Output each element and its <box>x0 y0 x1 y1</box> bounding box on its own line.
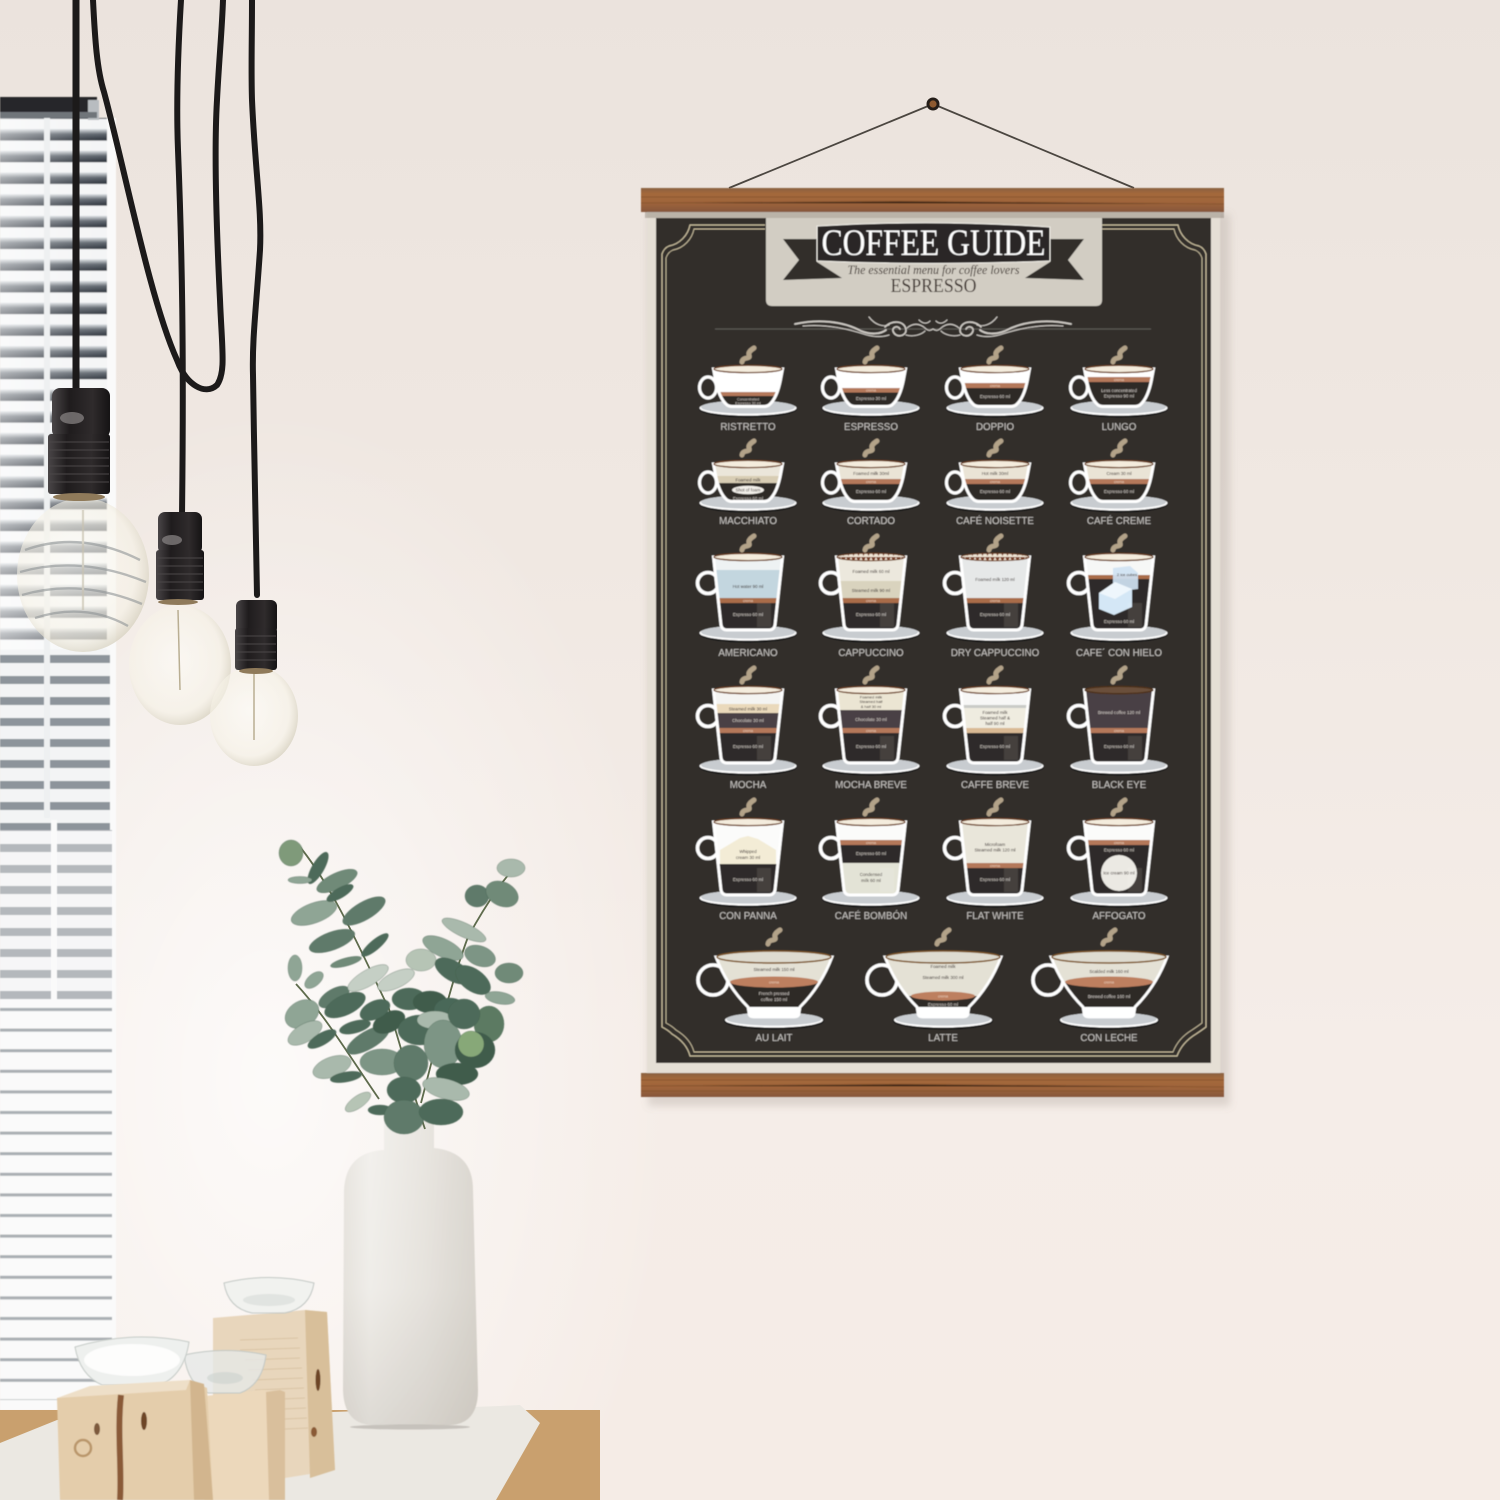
wood block right front <box>205 1390 285 1500</box>
cup: Black Eye: Brewed coffee 120 ml <box>1098 710 1140 715</box>
name: ESPRESSO <box>844 422 898 433</box>
eucalyptus leaves <box>279 840 525 1134</box>
name: RISTRETTO <box>720 422 776 433</box>
table runner <box>0 1405 540 1500</box>
cup: Cafe con Hielo: Espresso 60 ml <box>1104 619 1134 624</box>
cup: Cafe Bombon: Espresso 60 ml <box>856 851 886 856</box>
cup: Flat White: crema <box>990 864 1000 868</box>
lamp: left bulb <box>17 388 149 652</box>
name: AFFOGATO <box>1093 911 1146 922</box>
steam <box>1103 930 1115 944</box>
cup: Cafe con Hielo <box>1068 536 1168 659</box>
steam <box>1113 800 1125 814</box>
cup: Espresso <box>822 348 920 433</box>
cup: Mocha Breve: & half 30 ml <box>861 704 881 709</box>
steam <box>865 536 877 550</box>
cup: Ristretto: Concentrated <box>737 398 759 402</box>
steam <box>989 800 1001 814</box>
cup: Cafe Bombon: crema <box>866 841 876 845</box>
window blinds <box>0 97 116 1410</box>
steam <box>1113 348 1125 362</box>
cup: Ristretto: Espresso 30 ml <box>735 402 761 406</box>
cup: Affogato <box>1068 800 1168 922</box>
cup: Americano: Hot water 90 ml <box>733 584 763 589</box>
steam <box>989 348 1001 362</box>
hanging cord and pin <box>729 98 1134 188</box>
name: CAFÉ BOMBÓN <box>835 911 907 922</box>
cup: Flat White <box>944 800 1044 922</box>
cup: Cafe Noisette: Hot milk 30ml <box>982 471 1008 476</box>
cup: Affogato: Ice cream 90 ml <box>1103 870 1135 876</box>
cup: Americano: Espresso 60 ml <box>733 612 763 617</box>
name: CAPPUCCINO <box>838 648 904 659</box>
name: CAFE´ CON HIELO <box>1076 648 1162 659</box>
name: CAFÉ NOISETTE <box>956 516 1034 527</box>
steam <box>768 930 780 944</box>
cup: Latte: Steamed milk 300 ml <box>922 975 964 980</box>
foam pattern <box>838 554 904 560</box>
cup: Dry Cappuccino: crema <box>990 599 1000 603</box>
glass bowl middle <box>184 1350 266 1393</box>
cup: Cappuccino: Espresso 60 ml <box>856 612 886 617</box>
cup: Latte: Foamed milk <box>930 964 956 969</box>
cup: Au Lait <box>698 930 834 1044</box>
cup: Caffe Breve: half 90 ml <box>985 721 1005 726</box>
ribbon banner tails <box>783 239 1084 280</box>
cup: Mocha: Espresso 60 ml <box>733 744 763 749</box>
cup: Cafe Creme: crema <box>1114 480 1124 484</box>
cup: Black Eye: Espresso 60 ml <box>1104 744 1134 749</box>
cup: Cafe Creme <box>1070 441 1168 527</box>
foam pattern <box>962 554 1028 560</box>
name: DRY CAPPUCCINO <box>951 648 1040 659</box>
ice cubes: 2 ice cubes <box>1117 572 1137 577</box>
cup: Caffe Breve: Espresso 60 ml <box>980 744 1010 749</box>
cup: Espresso: Espresso 30 ml <box>856 396 886 401</box>
steam <box>742 800 754 814</box>
cup: Cappuccino <box>820 536 920 659</box>
table top <box>0 1410 600 1500</box>
name: CON PANNA <box>719 911 777 922</box>
cup: Cafe Noisette <box>946 441 1044 527</box>
subtitle: The essential menu for coffee lovers <box>848 262 1020 277</box>
cup: Cafe Bombon: Condensed <box>860 872 883 877</box>
cup: Caffe Breve: Steamed half & <box>980 716 1010 720</box>
cup: Mocha Breve <box>820 668 920 791</box>
name: MACCHIATO <box>719 516 777 527</box>
title: COFFEE GUIDE <box>822 223 1046 264</box>
cup: Cortado: Foamed milk 30ml <box>853 471 889 476</box>
name: CAFFE BREVE <box>961 780 1029 791</box>
name: MOCHA BREVE <box>835 780 907 791</box>
lamp: middle bulb <box>129 512 231 725</box>
poster shadow <box>648 214 1230 1106</box>
lamp: right bulb <box>210 600 298 766</box>
cup: Cortado <box>822 441 920 527</box>
steam <box>989 668 1001 682</box>
cup: Lungo: Espresso 90 ml <box>1104 394 1134 398</box>
cup: Macchiato: Foamed milk <box>735 478 761 482</box>
cup: Doppio <box>946 348 1044 433</box>
cup: Macchiato: Shot of foam <box>736 488 761 492</box>
cup: Flat White: Steamed milk 120 ml <box>974 848 1016 852</box>
name: MOCHA <box>730 780 767 791</box>
steam <box>742 668 754 682</box>
steam <box>865 348 877 362</box>
cup: Con Leche: crema <box>1104 980 1114 984</box>
cup: Ristretto <box>699 348 797 433</box>
cup: Cafe Noisette: crema <box>990 480 1000 484</box>
name: LATTE <box>928 1033 958 1044</box>
cup: Cafe Noisette: Espresso 60 ml <box>980 489 1010 494</box>
cup: Flat White: Espresso 60 ml <box>980 877 1010 882</box>
cup: Con Panna: cream 30 ml <box>736 855 760 860</box>
cup: Latte <box>867 930 1003 1044</box>
cup: Con Leche: Brewed coffee 160 ml <box>1088 994 1130 999</box>
dark rim <box>1085 686 1153 694</box>
cup: Con Panna: Espresso 60 ml <box>733 877 763 882</box>
steam <box>989 441 1001 455</box>
espresso heading: ESPRESSO <box>890 275 976 297</box>
steam <box>742 441 754 455</box>
cup: Cafe Bombon: milk 60 ml <box>861 878 881 883</box>
cup: Con Leche <box>1033 930 1169 1044</box>
cup: Americano <box>698 536 797 659</box>
cup: Cafe Bombon <box>820 800 920 922</box>
cup: Con Leche: Scalded milk 160 ml <box>1089 969 1129 974</box>
cup: Dry Cappuccino <box>944 536 1044 659</box>
cup: Doppio: crema <box>990 384 1000 388</box>
cup: Americano: crema <box>743 599 753 603</box>
cup: Lungo <box>1070 348 1168 433</box>
cup: Macchiato: Espresso 60 ml <box>733 496 763 501</box>
cup: Au Lait: crema <box>769 980 779 984</box>
wood block back <box>213 1310 335 1480</box>
name: CAFÉ CREME <box>1087 516 1152 527</box>
cup: Doppio: Espresso 60 ml <box>980 394 1010 399</box>
wood block left front <box>57 1380 213 1500</box>
cup: Lungo: crema <box>1114 378 1124 382</box>
ornamental divider <box>715 317 1151 336</box>
cup: Cortado: crema <box>866 480 876 484</box>
cup: Espresso: crema <box>866 388 876 392</box>
cup: Latte: crema <box>938 994 948 998</box>
cup: Au Lait: French pressed <box>759 991 790 996</box>
glass bowl left <box>75 1337 189 1385</box>
cup: Affogato: Espresso 60 ml <box>1104 848 1134 852</box>
cup: Mocha <box>698 668 797 791</box>
cup: Mocha: crema <box>743 729 753 733</box>
cup: Mocha Breve: Steamed half <box>860 699 883 704</box>
cup: Mocha Breve: Chocolate 30 ml <box>855 717 887 722</box>
steam <box>865 800 877 814</box>
bottom wooden rail <box>641 1073 1224 1097</box>
steam <box>937 930 949 944</box>
cup: Caffe Breve <box>944 668 1044 791</box>
cup: Mocha: Chocolate 30 ml <box>732 718 764 723</box>
cup: Cortado: Espresso 60 ml <box>856 489 886 494</box>
cup: Mocha Breve: Espresso 60 ml <box>856 744 886 749</box>
cup: Lungo: Less concentrated <box>1101 388 1137 393</box>
name: DOPPIO <box>976 422 1014 433</box>
cup: Con Panna: Whipped <box>739 849 757 854</box>
cup: Cappuccino: Steamed milk 90 ml <box>852 588 890 593</box>
plant stems <box>296 847 514 1129</box>
cup: Au Lait: coffee 150 ml <box>761 997 787 1002</box>
steam <box>989 536 1001 550</box>
name: BLACK EYE <box>1092 780 1147 791</box>
steam <box>865 441 877 455</box>
cup: Caffe Breve: Foamed milk <box>982 710 1008 715</box>
name: CON LECHE <box>1080 1033 1138 1044</box>
poster dark panel <box>656 218 1211 1063</box>
cup: Mocha: Steamed milk 30 ml <box>729 706 767 712</box>
steam <box>1113 668 1125 682</box>
steam <box>742 348 754 362</box>
poster paper <box>647 208 1220 1074</box>
cup: Mocha Breve: Foamed milk <box>860 694 882 700</box>
cup: Cappuccino: Foamed milk 60 ml <box>852 569 890 574</box>
decorative gold frame <box>662 225 1206 1056</box>
cup: Au Lait: Steamed milk 150 ml <box>754 967 795 972</box>
header plaque <box>766 218 1102 306</box>
steam <box>742 536 754 550</box>
cup: Black Eye <box>1068 668 1168 791</box>
cup: Cappuccino: crema <box>866 599 876 603</box>
poster <box>641 188 1230 1106</box>
name: FLAT WHITE <box>966 911 1024 922</box>
cup: Dry Cappuccino: Foamed milk 120 ml <box>975 577 1015 582</box>
top wooden rail <box>641 188 1224 218</box>
cup: Con Panna <box>698 800 797 922</box>
white vase <box>343 1120 478 1430</box>
name: AU LAIT <box>755 1033 793 1044</box>
cup: Flat White: Microfoam <box>985 842 1006 847</box>
cup: Latte: Espresso 60 ml <box>928 1002 958 1007</box>
steam <box>1113 441 1125 455</box>
cup: Cafe Creme: Espresso 60 ml <box>1104 489 1134 494</box>
name: LUNGO <box>1102 422 1137 433</box>
pendant cables <box>76 0 260 595</box>
name: AMERICANO <box>718 648 778 659</box>
cup: Macchiato <box>699 441 797 527</box>
ribbon banner centre <box>817 223 1050 264</box>
name: CORTADO <box>847 516 895 527</box>
cup: Cafe Creme: Cream 30 ml <box>1106 471 1132 476</box>
cup: Affogato: crema <box>1114 841 1124 845</box>
steam <box>1113 536 1125 550</box>
steam <box>865 668 877 682</box>
cup: Black Eye: crema <box>1114 729 1124 733</box>
cup: Dry Cappuccino: Espresso 60 ml <box>980 612 1010 617</box>
glass bowl on back block <box>224 1278 314 1313</box>
cup: Mocha Breve: crema <box>866 729 876 733</box>
